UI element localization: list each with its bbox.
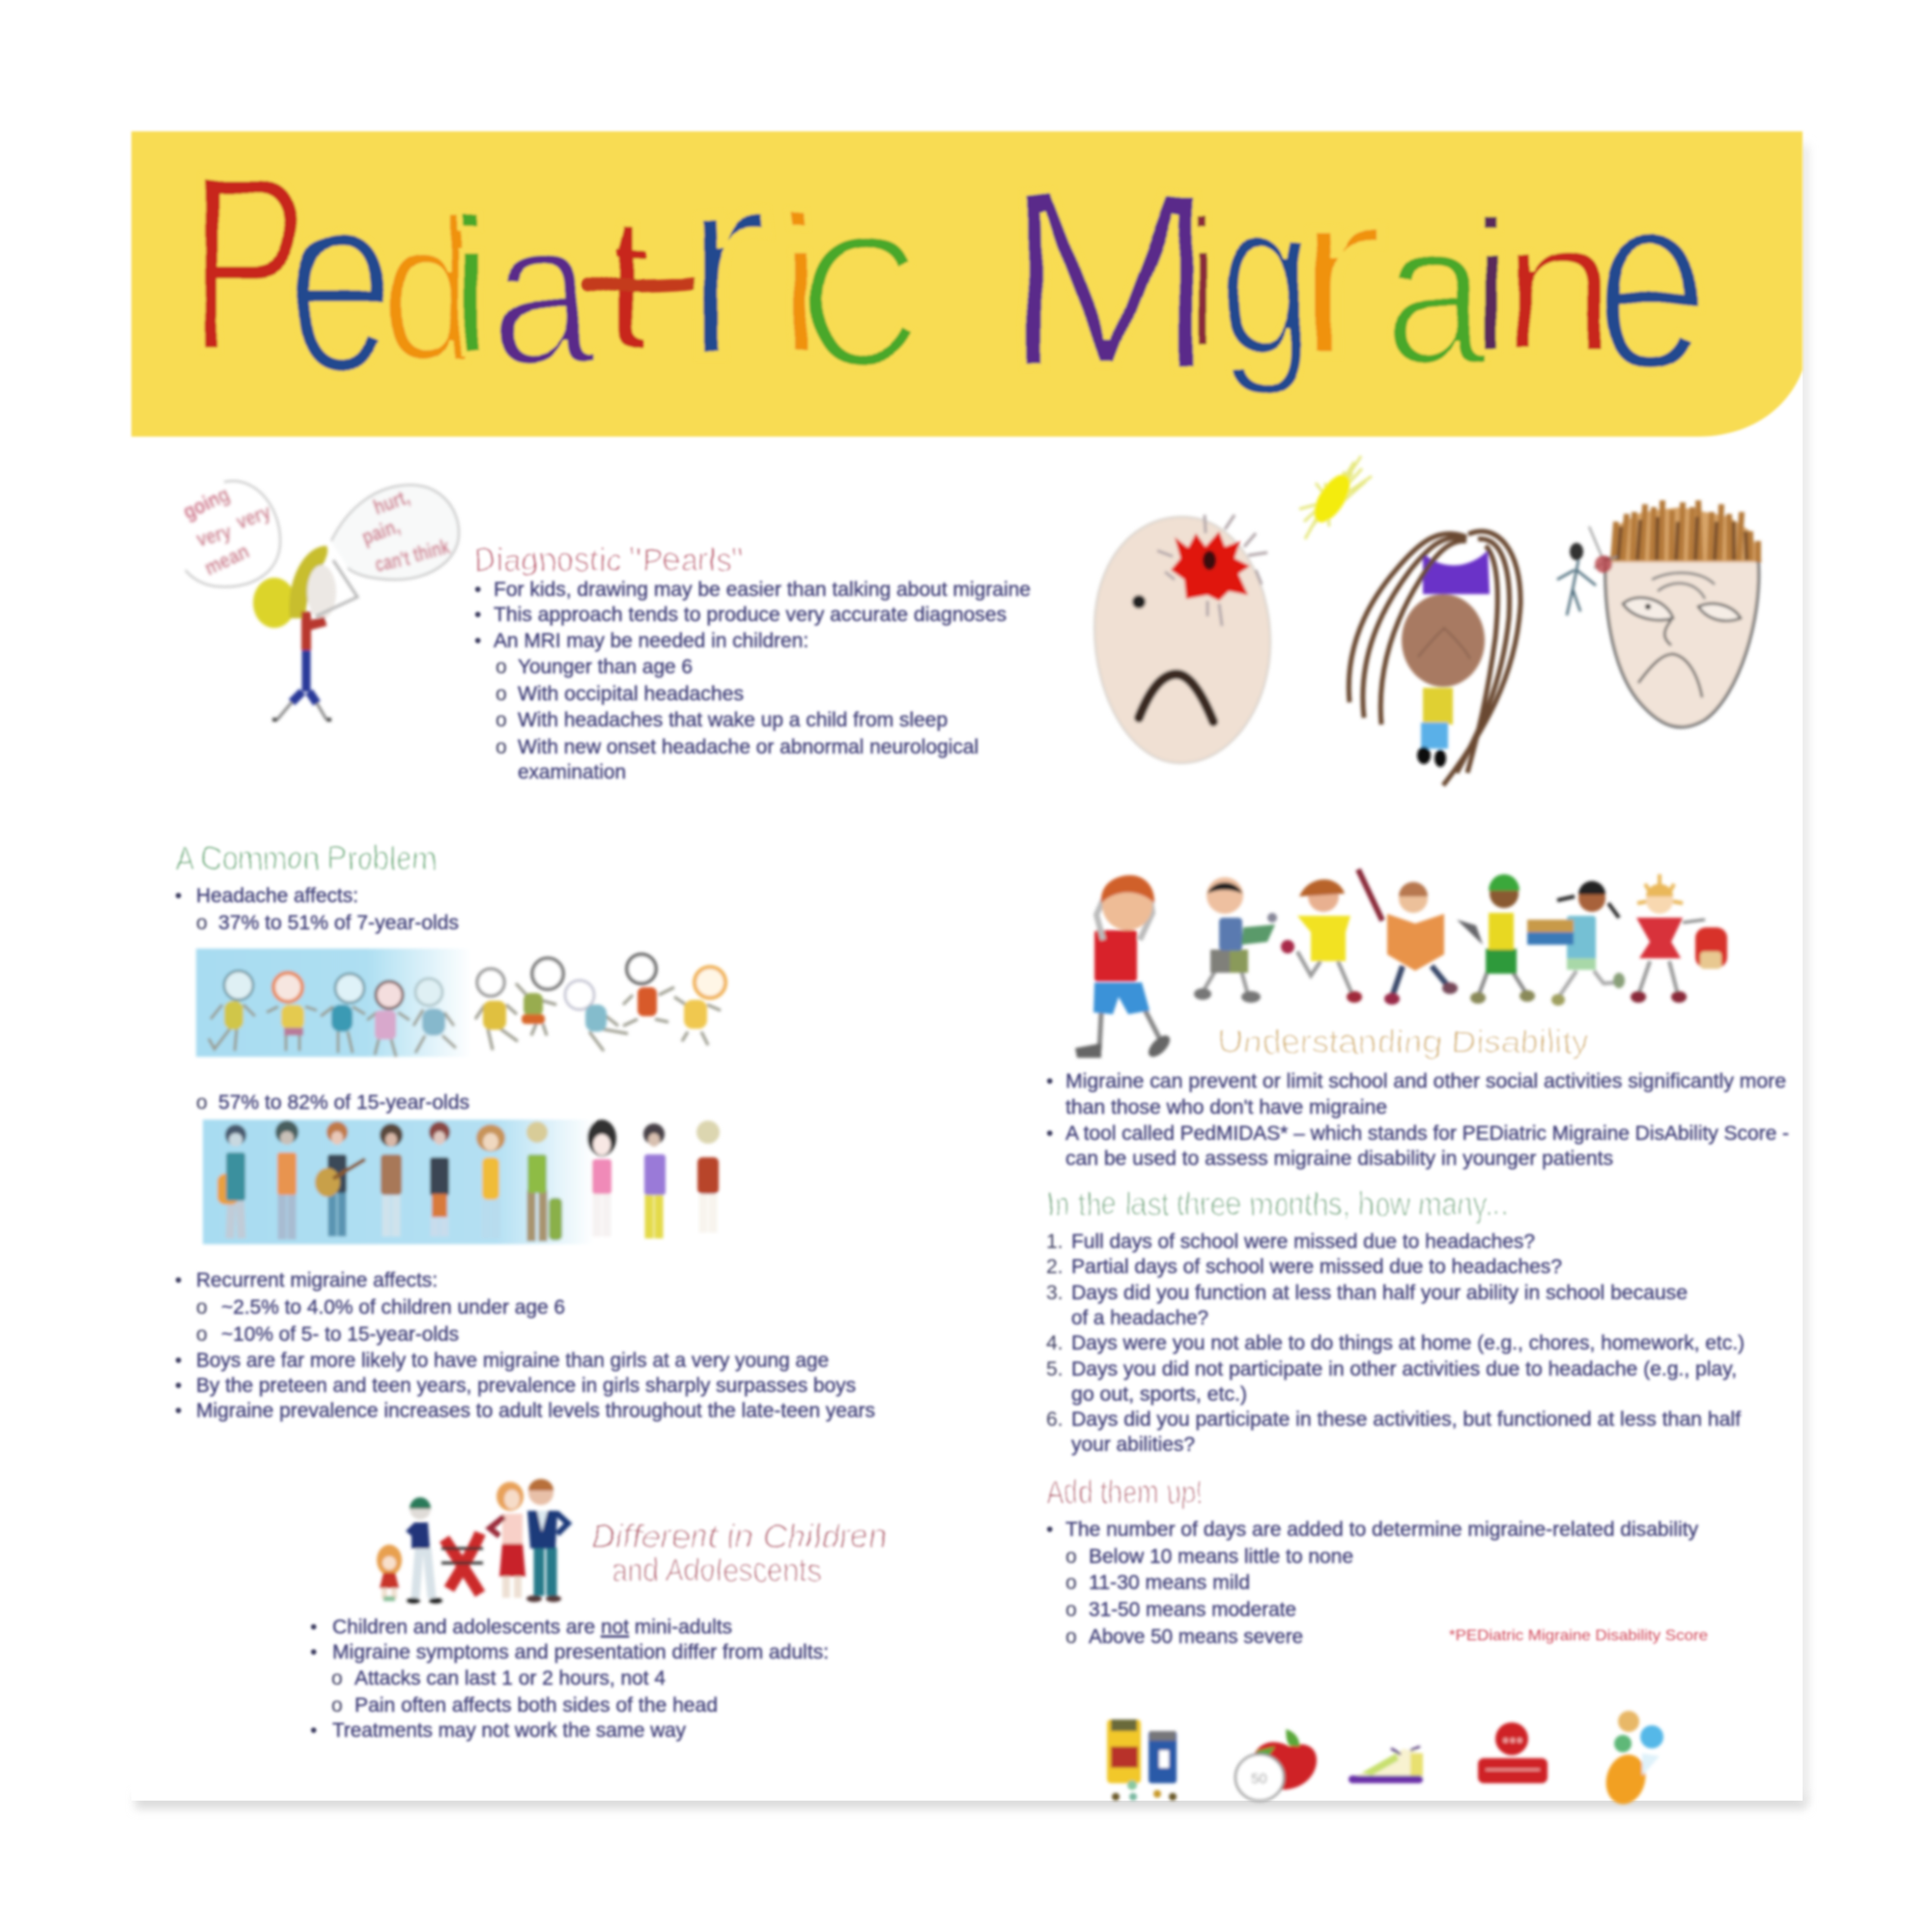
title <box>203 178 1700 395</box>
text block: different in children: o <box>331 1667 343 1690</box>
figure: man <box>526 1479 568 1602</box>
numbered list: PedMIDAS questions: go out, sports, etc.) <box>1071 1383 1247 1406</box>
text block: scoring: 11-30 means mild <box>1089 1572 1250 1594</box>
figure: boy <box>406 1497 442 1604</box>
text: recurrent migraine and prevalence: ~2.5% to 4.0% of children under age 6 <box>221 1296 565 1319</box>
text block: different in children: • <box>310 1641 317 1663</box>
text block: diagnostic pearls: With new onset headache or abnormal neurological <box>518 736 979 758</box>
text block: understanding disability: than those who don't have migraine <box>1065 1096 1387 1119</box>
text block: diagnostic pearls: o <box>496 709 507 731</box>
text block: diagnostic pearls: • <box>474 604 481 626</box>
numbered list: PedMIDAS questions <box>1046 1231 1745 1456</box>
speech bubble: right: pain, <box>358 514 403 550</box>
figure: pencil <box>1358 869 1382 921</box>
title: a <box>1385 178 1486 407</box>
text: fifteen year olds: 57% to 82% of 15-year-olds <box>218 1092 469 1114</box>
text block: scoring: o <box>1065 1626 1077 1648</box>
illustration: family with red not-equal sign <box>377 1479 568 1604</box>
title: e <box>287 136 395 426</box>
numbered list: PedMIDAS questions: Partial days of school were missed due to headaches? <box>1071 1256 1562 1278</box>
speech bubble: left <box>180 481 280 586</box>
text block: understanding disability: • <box>1046 1070 1053 1093</box>
text block: scoring: The number of days are added to determine migraine-related disability <box>1065 1519 1698 1541</box>
text block: different in children: Attacks can last 1 or 2 hours, not 4 <box>355 1667 666 1690</box>
text block: diagnostic pearls: This approach tends to produce very accurate diagnoses <box>494 604 1007 626</box>
numbered list: PedMIDAS questions: 3. <box>1046 1282 1064 1304</box>
text block: different in children: Pain often affects both sides of the head <box>355 1694 718 1717</box>
text: headache affects: o <box>196 912 208 934</box>
drawing: child under long brown hair <box>1349 531 1520 785</box>
text: recurrent migraine and prevalence: • <box>175 1269 182 1292</box>
title: n <box>1500 182 1616 390</box>
numbered list: PedMIDAS questions: Days were you not able to do things at home (e.g., chores, homework, etc.) <box>1071 1332 1745 1354</box>
figure: blond girl in red with bag <box>1631 874 1727 1003</box>
bullet: fifteen year olds: o <box>196 1092 208 1114</box>
heading: Understanding Disability: Understanding Disability <box>1218 1024 1589 1061</box>
text block: scoring: Above 50 means severe <box>1089 1626 1303 1648</box>
figure: child with orange book <box>1384 882 1458 1005</box>
numbered list: PedMIDAS questions: your abilities? <box>1071 1434 1195 1456</box>
text block: scoring <box>1046 1519 1698 1648</box>
numbered list: PedMIDAS questions: Full days of school were missed due to headaches? <box>1071 1231 1535 1253</box>
icon row: treatment icons <box>1107 1711 1663 1808</box>
figure: boy with headache <box>1075 875 1174 1061</box>
heading: Add them up: Add them up! <box>1046 1474 1203 1511</box>
numbered list: PedMIDAS questions: 2. <box>1046 1256 1064 1278</box>
title: C <box>799 197 923 405</box>
text block: understanding disability: Migraine can prevent or limit school and other social activities significantly more <box>1065 1070 1786 1093</box>
illustration: children's headache drawings <box>1094 456 1762 785</box>
title: d <box>382 179 475 401</box>
heading: Different in Children and Adolescents <box>591 1519 888 1589</box>
figure: girl with books <box>1527 881 1625 1006</box>
title: M <box>1002 137 1215 421</box>
title: P <box>187 121 310 405</box>
text block: diagnostic pearls <box>474 579 1031 783</box>
text block: understanding disability: • <box>1046 1122 1053 1145</box>
text block: diagnostic pearls: An MRI may be needed in children: <box>494 630 809 652</box>
text block: understanding disability <box>1046 1070 1789 1170</box>
figure: girl in yellow <box>1281 879 1362 1003</box>
text block: different in children: Treatments may not work the same way <box>332 1719 686 1742</box>
text: recurrent migraine and prevalence: Recurrent migraine affects: <box>196 1269 438 1292</box>
icon: apples <box>1236 1729 1317 1801</box>
illustration: girl with speech bubbles <box>180 481 459 720</box>
title: a <box>490 178 597 407</box>
banner: yellow header <box>131 131 1803 437</box>
heading: Diagnostic Pearls: Diagnostic "Pearls" <box>473 542 743 579</box>
illustration: schoolchildren with one boy holding his head <box>1075 869 1727 1061</box>
drawing: yellow sun <box>1299 456 1372 539</box>
figure <box>253 546 357 720</box>
text: recurrent migraine and prevalence: By the preteen and teen years, prevalence in girls sharply surpasses boys <box>196 1375 856 1397</box>
heading: A Common Problem: A Common Problem <box>175 840 437 877</box>
text: headache affects <box>175 885 459 934</box>
text: headache affects: 37% to 51% of 7-year-olds <box>218 912 459 934</box>
text block: different in children <box>310 1616 829 1742</box>
text: recurrent migraine and prevalence <box>175 1269 875 1422</box>
text block: diagnostic pearls: With headaches that wake up a child from sleep <box>518 709 948 731</box>
text block: different in children: Migraine symptoms and presentation differ from adults: <box>332 1641 829 1663</box>
text: recurrent migraine and prevalence: Migraine prevalence increases to adult levels throughout the late-teen years <box>196 1400 875 1422</box>
text: recurrent migraine and prevalence: ~10% of 5- to 15-year-olds <box>221 1323 459 1346</box>
infographic canvas <box>129 129 1811 1812</box>
text: recurrent migraine and prevalence: • <box>175 1375 182 1397</box>
text block: scoring: o <box>1065 1572 1077 1594</box>
icon: medicine bottles <box>1107 1719 1177 1801</box>
speech bubble: left: mean <box>201 539 253 581</box>
speech bubble: left: going <box>180 482 233 525</box>
text block: diagnostic pearls: With occipital headaches <box>518 683 744 705</box>
text: headache affects: • <box>175 885 182 907</box>
figure: boy with book <box>1194 877 1277 1003</box>
illustration: row of ten young children, five shaded <box>196 949 725 1057</box>
symbol: not equal <box>441 1533 483 1594</box>
text block: scoring: 31-50 means moderate <box>1089 1599 1296 1621</box>
text: recurrent migraine and prevalence: • <box>175 1400 182 1422</box>
speech bubble: left: very <box>194 519 235 552</box>
text block: diagnostic pearls: • <box>474 579 481 601</box>
numbered list: PedMIDAS questions: 1. <box>1046 1231 1064 1253</box>
text: headache affects: Headache affects: <box>196 885 358 907</box>
text block: scoring: o <box>1065 1599 1077 1621</box>
text block: different in children: • <box>310 1616 317 1638</box>
text block: scoring: Below 10 means little to none <box>1089 1546 1353 1568</box>
drawing: scowling face with spiky hair <box>1557 500 1762 727</box>
text block: understanding disability: A tool called PedMIDAS* – which stands for PEDiatric Migraine DisAbility Score - <box>1065 1122 1789 1145</box>
heading: Different in Children and Adolescents: Different in Children <box>591 1519 888 1555</box>
text block: diagnostic pearls: examination <box>518 761 626 783</box>
text block: scoring: o <box>1065 1546 1077 1568</box>
text block: different in children: o <box>331 1694 343 1717</box>
numbered list: PedMIDAS questions: 6. <box>1046 1408 1064 1431</box>
text: recurrent migraine and prevalence: o <box>196 1296 208 1319</box>
text block: scoring: • <box>1046 1519 1053 1541</box>
heading: Different in Children and Adolescents: and Adolescents <box>611 1552 821 1589</box>
numbered list: PedMIDAS questions: 5. <box>1046 1358 1064 1380</box>
text block: different in children: • <box>310 1719 317 1742</box>
title: r <box>677 115 774 411</box>
text block: diagnostic pearls: For kids, drawing may be easier than talking about migraine <box>494 579 1031 601</box>
text block: diagnostic pearls: o <box>496 683 507 705</box>
text block: different in children: Children and adolescents are not mini-adults <box>332 1616 732 1638</box>
text block: diagnostic pearls: o <box>496 736 507 758</box>
text block: diagnostic pearls: • <box>474 630 481 652</box>
numbered list: PedMIDAS questions: of a headache? <box>1071 1307 1208 1329</box>
figure: woman <box>490 1482 526 1598</box>
numbered list: PedMIDAS questions: Days did you function at less than half your ability in school because <box>1071 1282 1688 1304</box>
icon: red person bar <box>1478 1722 1548 1783</box>
speech bubble: right: hurt, <box>370 484 412 520</box>
illustration: row of ten teens, seven shaded <box>203 1120 720 1244</box>
icon: orange with small circles <box>1601 1711 1663 1808</box>
icon: apples: 50 <box>1251 1771 1267 1787</box>
text: recurrent migraine and prevalence: o <box>196 1323 208 1346</box>
text block: diagnostic pearls: o <box>496 656 507 678</box>
speech bubble: right: think <box>411 534 453 567</box>
drawing: pale face with red burst <box>1094 515 1270 763</box>
icon: red person bar: ●●● <box>1502 1733 1523 1747</box>
title: i <box>779 179 821 392</box>
text block: understanding disability: can be used to assess migraine disability in younger patients <box>1065 1148 1613 1170</box>
title: t <box>601 175 660 393</box>
speech bubble: right: can't <box>373 546 412 577</box>
figure: boy with green cap <box>1457 874 1535 1004</box>
text: recurrent migraine and prevalence: Boys are far more likely to have migraine than girls at a very young age <box>196 1350 829 1372</box>
text block: diagnostic pearls: Younger than age 6 <box>518 656 693 678</box>
title: g <box>1219 160 1314 397</box>
numbered list: PedMIDAS questions: 4. <box>1046 1332 1064 1354</box>
text: recurrent migraine and prevalence: • <box>175 1350 182 1372</box>
title: i <box>1179 182 1221 385</box>
title: i <box>446 179 495 391</box>
icon: sneaker <box>1349 1747 1423 1783</box>
numbered list: PedMIDAS questions: Days you did not participate in other activities due to headache (e.g., play, <box>1071 1358 1737 1380</box>
figure: little girl <box>377 1545 402 1599</box>
footnote: *PEDiatric Migraine Disability Score <box>1449 1628 1708 1644</box>
heading: In the last three months: In the last three months, how many... <box>1046 1186 1509 1223</box>
title: r <box>1291 137 1387 406</box>
panel: poster background <box>131 131 1808 1808</box>
title: e <box>1595 139 1707 424</box>
title: i <box>1468 180 1511 391</box>
speech bubble: left: very <box>233 499 274 534</box>
numbered list: PedMIDAS questions: Days did you participate in these activities, but functioned at less than half <box>1071 1408 1741 1431</box>
speech bubble: right <box>331 484 459 580</box>
